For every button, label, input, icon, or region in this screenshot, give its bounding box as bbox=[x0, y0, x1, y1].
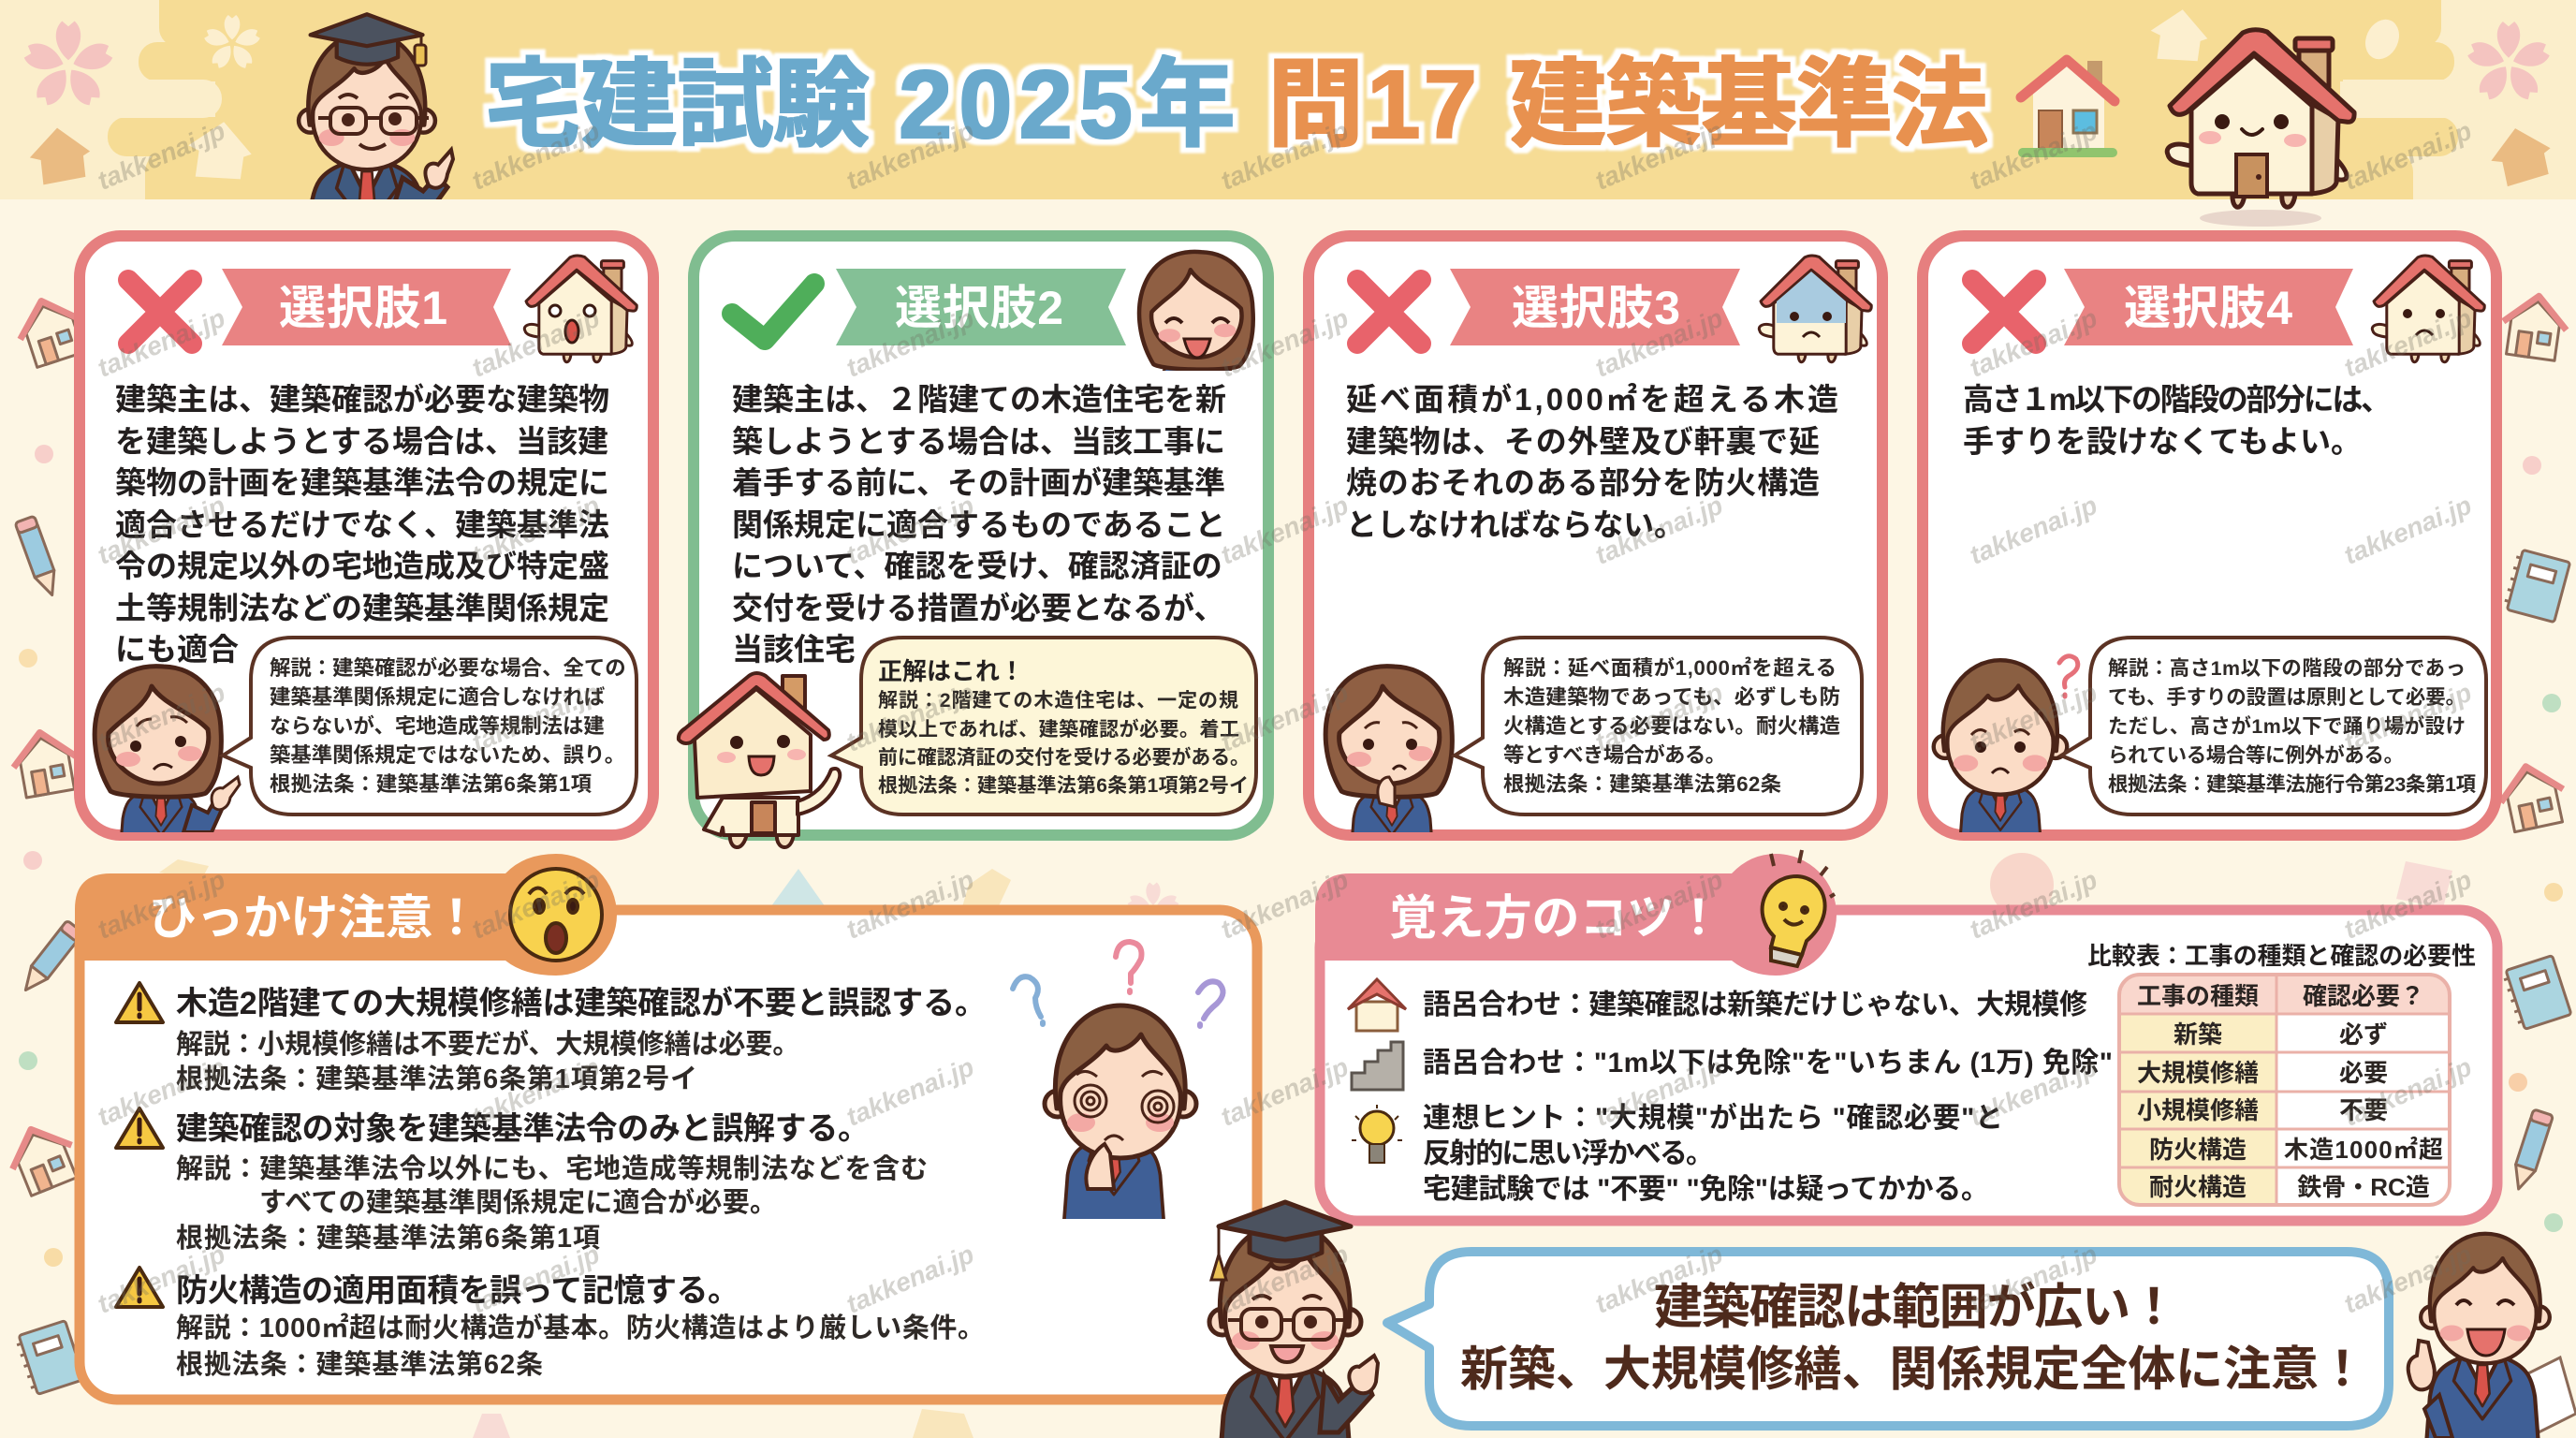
question text: 延べ面積が1,000㎡を超える木造 bbox=[1346, 382, 1838, 417]
warning item 1: 解説：小規模修繕は不要だが、大規模修繕は必要。 bbox=[176, 1028, 799, 1060]
warning item 2: すべての建築基準関係規定に適合が必要。 bbox=[259, 1186, 777, 1218]
question text: 築しようとする場合は、当該工事に bbox=[732, 424, 1225, 459]
watermarks: takkenai.jp bbox=[842, 116, 978, 196]
watermarks: takkenai.jp bbox=[1591, 116, 1727, 196]
tip 1 bbox=[1348, 979, 2087, 1031]
icon: question marks bbox=[1013, 942, 1223, 1026]
correct answer bubble: 解説：2階建ての木造住宅は、一定の規 bbox=[878, 690, 1238, 712]
tab heading: 覚え方のコツ！ bbox=[1389, 891, 1722, 945]
correct answer bubble: 前に確認済証の交付を受ける必要がある。 bbox=[878, 746, 1250, 769]
character: big house mascot bbox=[2167, 30, 2354, 227]
comparison table: 鉄骨・RC造 bbox=[2297, 1173, 2430, 1201]
heading ribbon bbox=[1450, 269, 1740, 345]
question text: にも適合 bbox=[115, 632, 239, 667]
watermarks: takkenai.jp bbox=[94, 116, 229, 196]
explanation bubble: 根拠法条：建築基準法第62条 bbox=[1503, 772, 1781, 796]
warning item 2: 建築確認の対象を建築基準法令のみと誤解する。 bbox=[176, 1111, 870, 1147]
heading ribbon: 選択肢2 bbox=[895, 282, 1063, 334]
warning item 3: 防火構造の適用面積を誤って記憶する。 bbox=[176, 1273, 739, 1309]
watermarks: takkenai.jp bbox=[1966, 1052, 2101, 1132]
question text: 令の規定以外の宅地造成及び特定盛 bbox=[115, 549, 609, 583]
icon: surprised house bbox=[524, 256, 637, 362]
watermarks: takkenai.jp bbox=[1591, 1052, 1727, 1132]
question text: 適合させるだけでなく、建築基準法 bbox=[115, 507, 609, 542]
watermarks: takkenai.jp bbox=[842, 1052, 978, 1132]
tab heading bbox=[75, 854, 617, 976]
watermarks: takkenai.jp bbox=[1966, 678, 2101, 757]
icon: red cross bbox=[1357, 280, 1421, 344]
tip 3: 反射的に思い浮かべる。 bbox=[1423, 1138, 1714, 1169]
question text: 交付を受ける措置が必要となるが、 bbox=[732, 591, 1224, 625]
watermarks: takkenai.jp bbox=[842, 865, 978, 945]
watermarks: takkenai.jp bbox=[94, 1052, 229, 1132]
watermarks: takkenai.jp bbox=[1591, 491, 1727, 570]
title bbox=[485, 51, 1988, 158]
heading ribbon: 選択肢4 bbox=[2124, 282, 2292, 334]
explanation bubble: られている場合等に例外がある。 bbox=[2108, 743, 2404, 767]
comparison table: 必ず bbox=[2339, 1020, 2388, 1049]
header band bbox=[0, 0, 2576, 199]
title: 建築基準法 bbox=[1510, 51, 1988, 158]
watermarks: takkenai.jp bbox=[2340, 678, 2476, 757]
question text bbox=[732, 382, 1226, 667]
comparison table: 小規模修繕 bbox=[2137, 1096, 2259, 1124]
watermarks: takkenai.jp bbox=[2340, 491, 2476, 570]
heading ribbon bbox=[2064, 269, 2353, 345]
watermarks: takkenai.jp bbox=[1966, 865, 2101, 945]
comparison table: 新築 bbox=[2174, 1020, 2222, 1049]
watermarks: takkenai.jp bbox=[2340, 1052, 2476, 1132]
watermarks: takkenai.jp bbox=[2340, 1240, 2476, 1319]
panel: option 1 bbox=[80, 236, 653, 865]
explanation bubble: 根拠法条：建築基準法施行令第23条第1項 bbox=[2108, 773, 2477, 796]
panel: memory tips bbox=[1315, 850, 2497, 1221]
tip 3: 連想ヒント："大規模"が出たら "確認必要"と bbox=[1423, 1102, 2003, 1134]
watermarks: takkenai.jp bbox=[1217, 1052, 1353, 1132]
explanation bubble: 木造建築物であっても、必ずしも防 bbox=[1503, 685, 1840, 709]
question text: 焼のおそれのある部分を防火構造 bbox=[1346, 465, 1820, 500]
callout speech bubble: 建築確認は範囲が広い！ bbox=[1654, 1281, 2178, 1335]
watermarks: takkenai.jp bbox=[468, 1240, 604, 1319]
heading ribbon bbox=[836, 269, 1126, 345]
title: 宅建試験 bbox=[485, 51, 870, 158]
icon: sad house bbox=[2372, 256, 2484, 362]
title: 2025年 bbox=[899, 51, 1236, 158]
watermarks: takkenai.jp bbox=[2340, 865, 2476, 945]
comparison table: 確認必要？ bbox=[2303, 982, 2424, 1010]
watermarks: takkenai.jp bbox=[2340, 116, 2476, 196]
comparison table caption: 比較表：工事の種類と確認の必要性 bbox=[2087, 942, 2476, 970]
comparison table: 耐火構造 bbox=[2149, 1173, 2247, 1201]
question text bbox=[1346, 382, 1838, 542]
title: 問17 bbox=[1267, 51, 1477, 158]
watermarks: takkenai.jp bbox=[842, 1240, 978, 1319]
character: worried woman pointing bbox=[92, 664, 242, 832]
warning item 1: 根拠法条：建築基準法第6条第1項第2号イ bbox=[176, 1064, 697, 1094]
icon: red cross bbox=[128, 280, 192, 344]
question text: 高さ１m以下の階段の部分には、 bbox=[1963, 382, 2392, 417]
warning item 3 bbox=[116, 1268, 985, 1380]
character: thinking woman bbox=[1324, 664, 1455, 832]
question text: について、確認を受け、確認済証の bbox=[732, 549, 1222, 583]
watermarks: takkenai.jp bbox=[1217, 116, 1353, 196]
watermarks: takkenai.jp bbox=[1217, 1240, 1353, 1319]
watermarks: takkenai.jp bbox=[1591, 678, 1727, 757]
watermarks: takkenai.jp bbox=[1217, 678, 1353, 757]
character: thumbs-up boy bbox=[2408, 1234, 2576, 1438]
watermarks: takkenai.jp bbox=[1217, 491, 1353, 570]
watermarks: takkenai.jp bbox=[1591, 303, 1727, 383]
warning item 2: 根拠法条：建築基準法第6条第1項 bbox=[176, 1223, 600, 1254]
comparison table: 木造1000㎡超 bbox=[2284, 1136, 2443, 1164]
watermarks: takkenai.jp bbox=[468, 1052, 604, 1132]
question text: 土等規制法などの建築基準関係規定 bbox=[115, 591, 609, 625]
tab heading: ひっかけ注意！ bbox=[149, 891, 480, 945]
house face bbox=[717, 735, 806, 775]
watermarks: takkenai.jp bbox=[1591, 865, 1727, 945]
explanation bubble: 築基準関係規定ではないため、誤り。 bbox=[270, 743, 625, 767]
character: confused boy bbox=[1045, 1005, 1196, 1231]
question text: 建築主は、２階建ての木造住宅を新 bbox=[732, 382, 1226, 417]
explanation bubble bbox=[2061, 638, 2486, 814]
character: teacher at bottom bbox=[1209, 1202, 1378, 1438]
explanation bubble: ても、手すりの設置は原則として必要。 bbox=[2108, 686, 2466, 709]
warning item 2 bbox=[116, 1108, 928, 1254]
watermarks: takkenai.jp bbox=[468, 865, 604, 945]
explanation bubble: 火構造とする必要はない。耐火構造 bbox=[1503, 714, 1840, 738]
comparison table: 必要 bbox=[2339, 1059, 2388, 1087]
character: teacher in header bbox=[296, 12, 455, 199]
watermarks: takkenai.jp bbox=[468, 116, 604, 196]
question text: 建築主は、建築確認が必要な建築物 bbox=[115, 382, 609, 417]
explanation bubble: 解説：延べ面積が1,000㎡を超える bbox=[1503, 655, 1837, 680]
question text: を建築しようとする場合は、当該建 bbox=[115, 424, 608, 459]
correct answer bubble: 模以上であれば、建築確認が必要。着工 bbox=[878, 718, 1239, 741]
watermarks: takkenai.jp bbox=[1966, 303, 2101, 383]
explanation bubble: ならないが、宅地造成等規制法は建 bbox=[270, 713, 605, 738]
watermarks: takkenai.jp bbox=[1966, 491, 2101, 570]
warning item 1: 木造2階建ての大規模修繕は建築確認が不要と誤認する。 bbox=[176, 985, 987, 1021]
icon: green check bbox=[732, 284, 814, 340]
correct answer bubble bbox=[831, 638, 1256, 814]
comparison table: 工事の種類 bbox=[2137, 982, 2259, 1010]
comparison table: 防火構造 bbox=[2149, 1136, 2247, 1164]
watermarks: takkenai.jp bbox=[94, 678, 229, 757]
question text: 建築物は、その外壁及び軒裏で延 bbox=[1346, 424, 1820, 459]
watermarks: takkenai.jp bbox=[468, 678, 604, 757]
watermarks: takkenai.jp bbox=[1591, 1240, 1727, 1319]
tip 3 bbox=[1352, 1102, 2003, 1205]
heading ribbon: 選択肢3 bbox=[1512, 282, 1680, 334]
question text: 築物の計画を建築基準法令の規定に bbox=[115, 465, 609, 500]
icon: small house in title bbox=[2018, 60, 2117, 157]
question text: 関係規定に適合するものであること bbox=[732, 507, 1226, 542]
character: worried man bbox=[1932, 658, 2069, 832]
watermarks: takkenai.jp bbox=[94, 303, 229, 383]
watermarks: takkenai.jp bbox=[94, 491, 229, 570]
background decorations bbox=[1, 291, 2571, 1438]
icon: surprised face bbox=[510, 869, 602, 961]
panel: option 4 bbox=[1923, 236, 2496, 860]
explanation bubble: 根拠法条：建築基準法第6条第1項 bbox=[270, 772, 593, 796]
heading ribbon: 選択肢1 bbox=[279, 282, 447, 334]
tip 2 bbox=[1352, 1042, 2113, 1090]
question text: 当該住宅 bbox=[732, 632, 856, 667]
explanation bubble: ただし、高さが1m以下で踊り場が設け bbox=[2108, 714, 2466, 738]
watermarks: takkenai.jp bbox=[468, 303, 604, 383]
panel: option 3 bbox=[1309, 236, 1882, 865]
character: smiling woman bbox=[1136, 249, 1255, 371]
question text bbox=[115, 382, 609, 667]
explanation bubble: 解説：建築確認が必要な場合、全ての bbox=[270, 655, 626, 680]
panel: trap warnings bbox=[75, 854, 1257, 1400]
watermarks: takkenai.jp bbox=[842, 678, 978, 757]
comparison table: 不要 bbox=[2339, 1096, 2388, 1124]
comparison table: 大規模修繕 bbox=[2137, 1059, 2259, 1087]
tab heading bbox=[1315, 854, 1837, 976]
watermarks: takkenai.jp bbox=[842, 491, 978, 570]
question text: 手すりを設けなくてもよい。 bbox=[1963, 424, 2362, 459]
tip 2: 語呂合わせ："1m以下は免除"を"いちまん (1万) 免除" bbox=[1423, 1048, 2113, 1078]
tip 1: 語呂合わせ：建築確認は新築だけじゃない、大規模修 bbox=[1423, 990, 2087, 1020]
tip 3: 宅建試験では "不要" "免除"は疑ってかかる。 bbox=[1423, 1174, 1989, 1205]
explanation bubble: 解説：高さ1m以下の階段の部分であっ bbox=[2108, 657, 2466, 680]
watermarks: takkenai.jp bbox=[94, 1240, 229, 1319]
icon: sad blue house bbox=[1759, 256, 1871, 362]
question text bbox=[1963, 382, 2392, 459]
watermarks: takkenai.jp bbox=[94, 865, 229, 945]
warning item 3: 解説：1000㎡超は耐火構造が基本。防火構造はより厳しい条件。 bbox=[176, 1312, 985, 1343]
watermarks: takkenai.jp bbox=[1966, 116, 2101, 196]
callout speech bubble: 新築、大規模修繕、関係規定全体に注意！ bbox=[1460, 1343, 2366, 1396]
icon: red cross bbox=[1972, 280, 2036, 344]
explanation bubble: 建築基準関係規定に適合しなければ bbox=[270, 685, 605, 709]
warning item 2: 解説：建築基準法令以外にも、宅地造成等規制法などを含む bbox=[176, 1153, 928, 1184]
correct answer bubble: 根拠法条：建築基準法第6条第1項第2号イ bbox=[878, 775, 1249, 797]
watermarks: takkenai.jp bbox=[2340, 303, 2476, 383]
correct answer bubble: 正解はこれ！ bbox=[878, 657, 1024, 685]
warning item 3: 根拠法条：建築基準法第62条 bbox=[176, 1349, 543, 1380]
watermarks: takkenai.jp bbox=[842, 303, 978, 383]
callout speech bubble bbox=[1387, 1252, 2389, 1426]
explanation bubble: 等とすべき場合がある。 bbox=[1503, 742, 1726, 767]
warning item 1 bbox=[116, 983, 987, 1094]
watermarks: takkenai.jp bbox=[1217, 865, 1353, 945]
icon: question mark bbox=[2059, 656, 2078, 697]
panel: option 2 correct bbox=[679, 236, 1268, 847]
comparison table bbox=[2119, 975, 2450, 1205]
question text: としなければならない。 bbox=[1346, 507, 1685, 542]
heading ribbon bbox=[222, 269, 511, 345]
question text: 着手する前に、その計画が建築基準 bbox=[732, 465, 1225, 500]
watermarks: takkenai.jp bbox=[468, 491, 604, 570]
icon: smiling light bulb bbox=[1763, 850, 1835, 966]
explanation bubble bbox=[1455, 638, 1862, 814]
explanation bubble bbox=[223, 638, 637, 814]
watermarks: takkenai.jp bbox=[1217, 303, 1353, 383]
watermarks: takkenai.jp bbox=[1966, 1240, 2101, 1319]
character: cheering house bbox=[679, 673, 840, 847]
